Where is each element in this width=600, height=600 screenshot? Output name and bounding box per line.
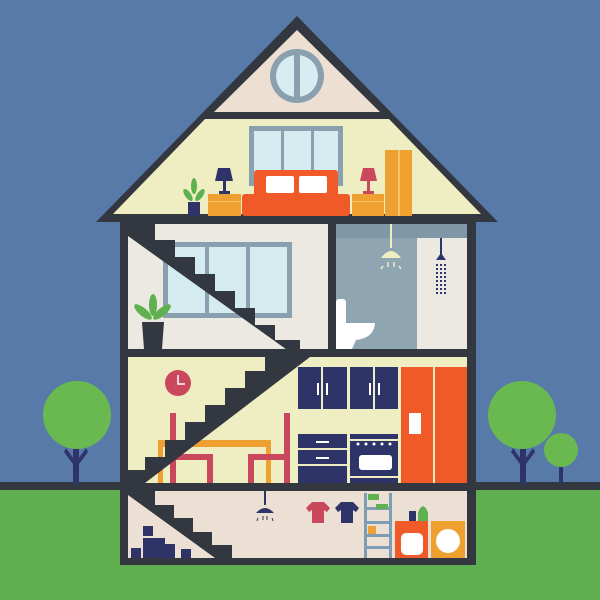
oven	[350, 434, 398, 483]
shower	[436, 238, 446, 295]
shirt navy	[335, 502, 359, 523]
stair room	[128, 224, 328, 352]
stairs basement	[128, 491, 232, 558]
table	[158, 440, 271, 483]
washer	[395, 511, 428, 558]
drawers	[298, 434, 347, 483]
ladder shelf	[364, 493, 392, 558]
dryer	[418, 506, 465, 558]
tree right	[488, 381, 556, 484]
ceiling lamp	[381, 224, 401, 269]
bed	[242, 170, 350, 216]
plant	[182, 178, 206, 216]
clock	[165, 370, 191, 396]
stairs upper	[128, 224, 300, 352]
fridge	[401, 367, 467, 483]
stairs middle	[128, 357, 310, 483]
plant	[132, 294, 173, 349]
nightstand left	[208, 194, 241, 216]
tree left	[43, 381, 111, 484]
attic top	[214, 30, 380, 112]
nightstand right	[352, 194, 384, 216]
boxes	[131, 526, 191, 558]
basement	[128, 491, 467, 558]
bathroom	[336, 224, 467, 349]
lamp left	[215, 168, 233, 194]
icon: round window	[270, 49, 324, 103]
toilet	[336, 299, 375, 349]
window	[163, 242, 292, 318]
roof outline	[96, 16, 498, 222]
chair right	[248, 413, 290, 483]
house	[96, 16, 498, 565]
upper cabinets	[298, 367, 398, 409]
tree small	[544, 433, 578, 484]
lamp right	[360, 168, 377, 194]
bedroom	[113, 119, 481, 216]
chair left	[170, 413, 213, 483]
walls outline	[120, 215, 476, 565]
wardrobe	[385, 150, 412, 216]
basement lamp	[256, 491, 274, 521]
kitchen level	[128, 357, 467, 483]
ground	[0, 482, 600, 600]
shirt red	[306, 502, 330, 523]
bedroom window	[249, 126, 343, 186]
